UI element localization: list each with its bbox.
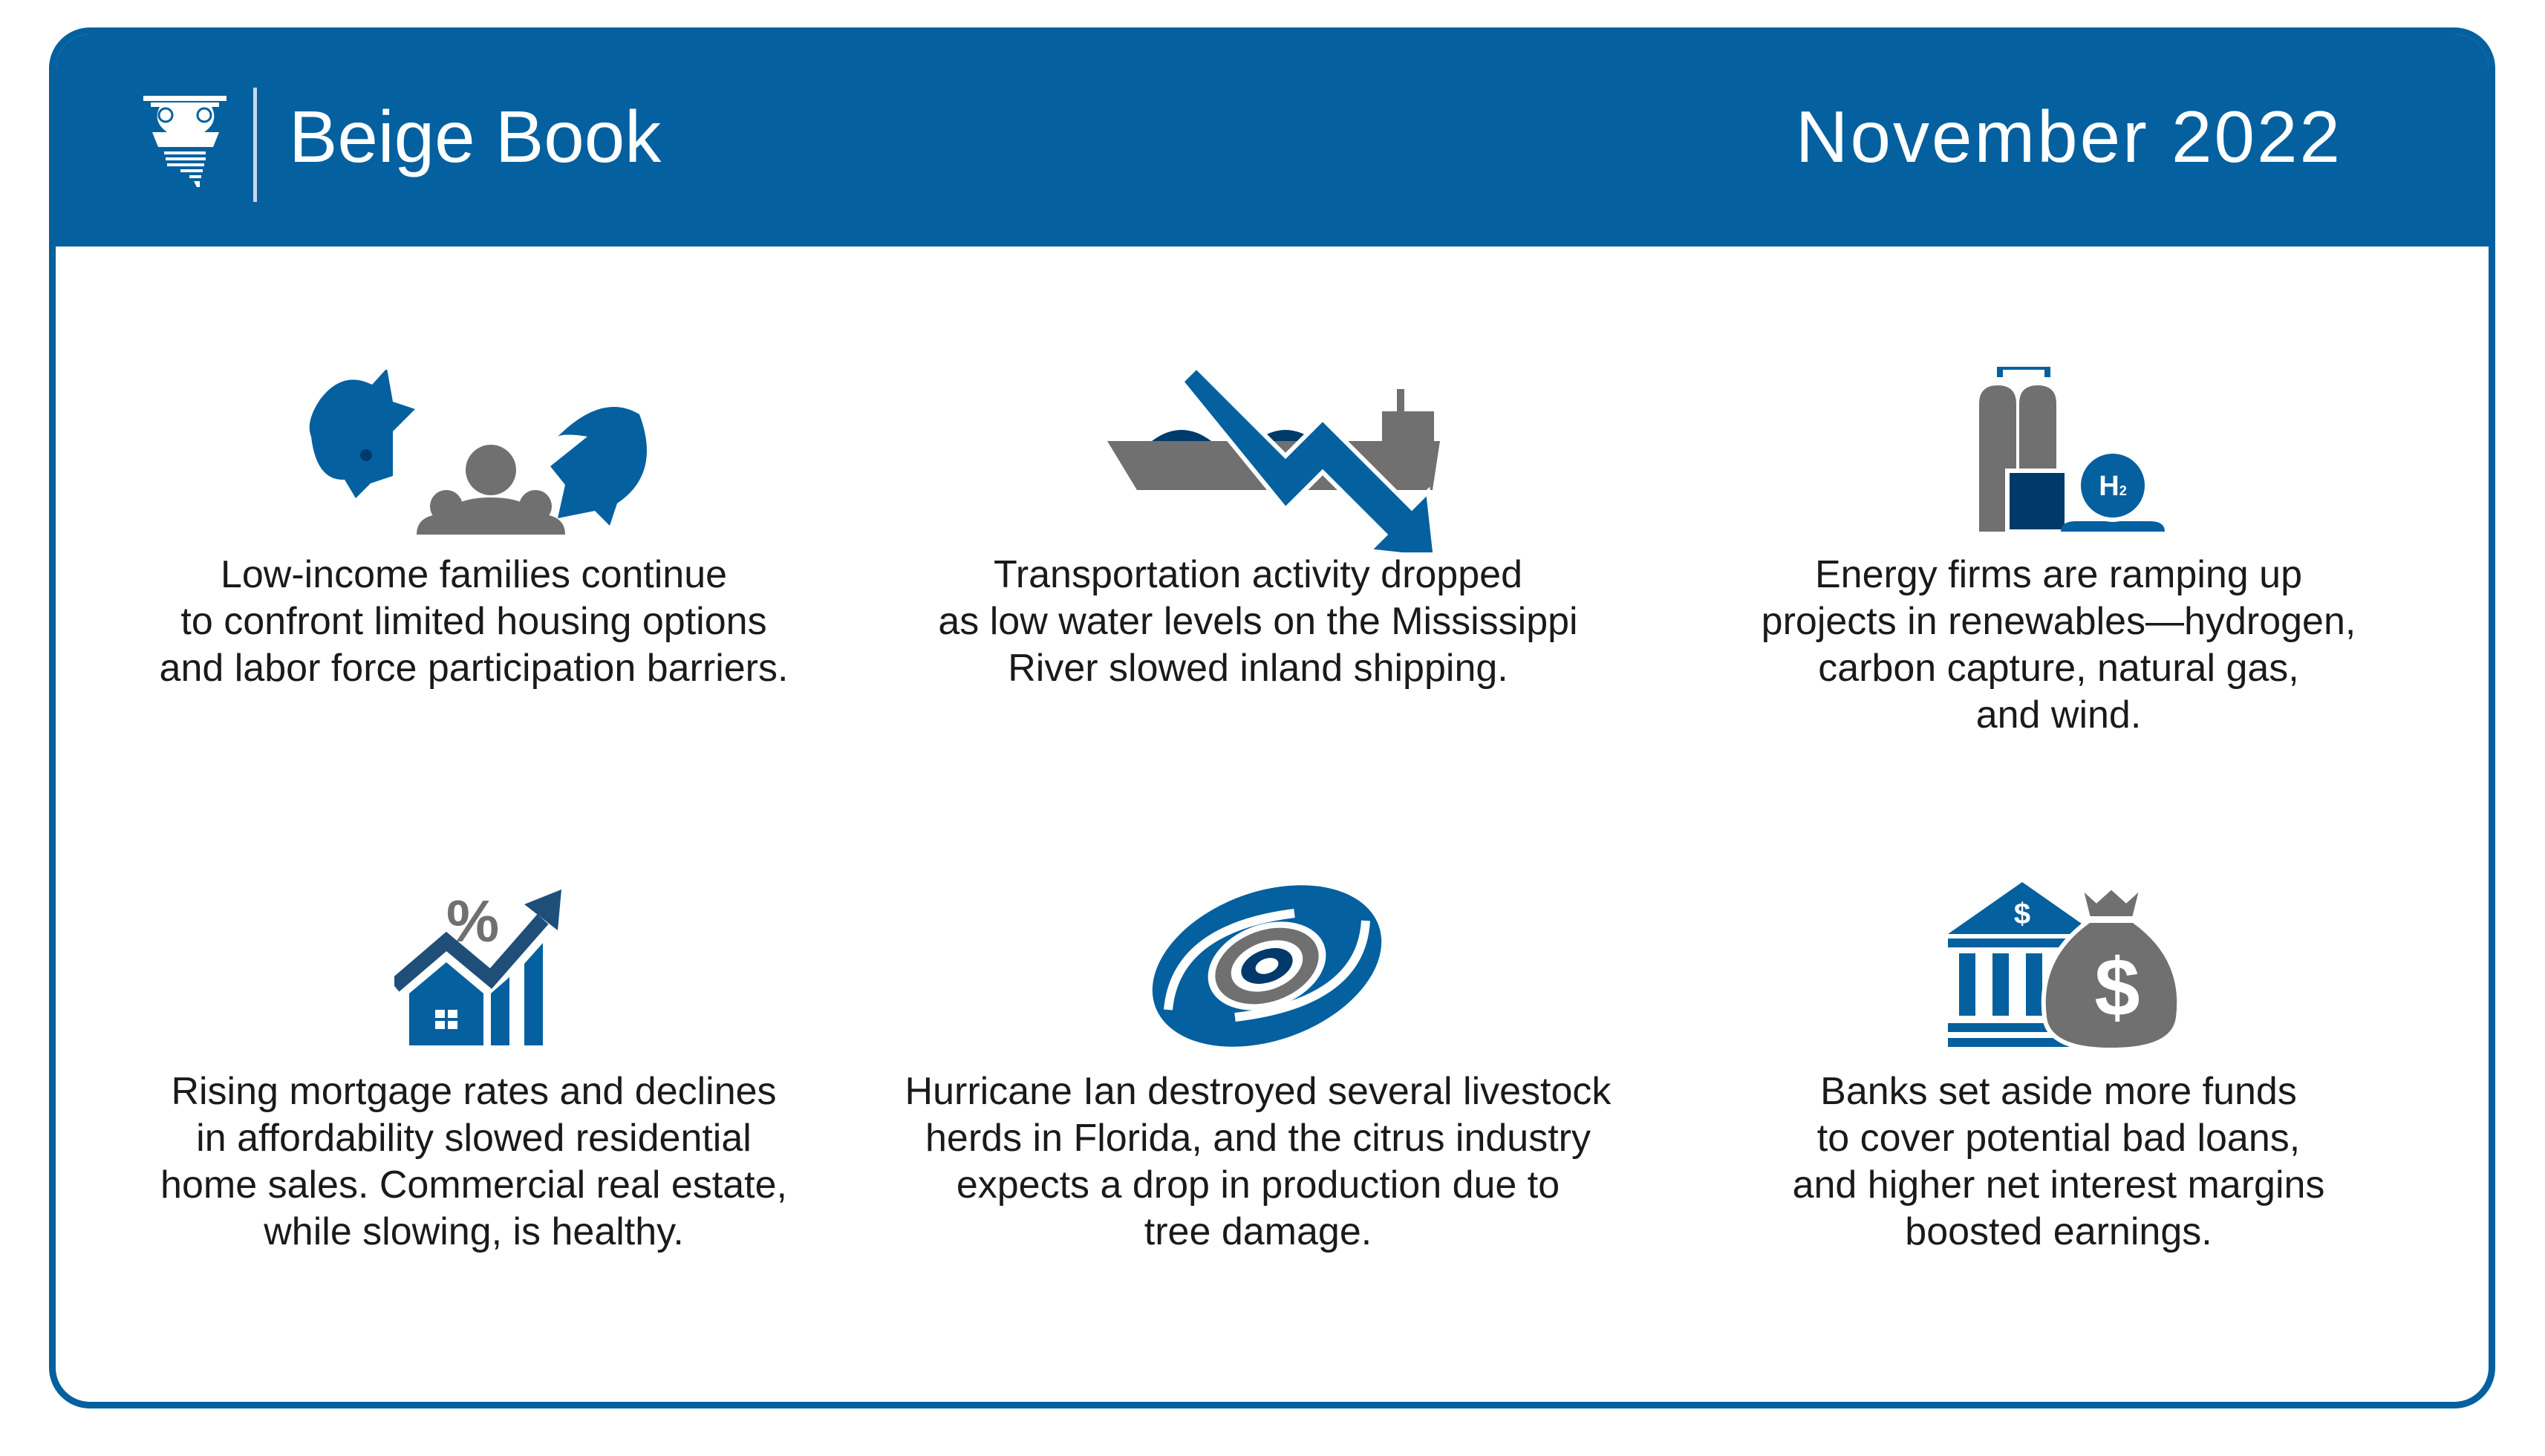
text: mortgage: home sales. Commercial real estate, [160, 1163, 787, 1207]
text: energy: carbon capture, natural gas, [1818, 647, 2299, 690]
icon: hydrogen tanks [1979, 367, 2165, 532]
icon: bank and money bag: $ [2014, 898, 2030, 930]
text: energy: Energy firms are ramping up [1815, 553, 2302, 596]
text: mortgage: Rising mortgage rates and declines [171, 1070, 777, 1113]
header band [56, 34, 2489, 247]
title: Beige Book [289, 96, 661, 177]
icon: barge with down arrow [1107, 370, 1440, 552]
text: transportation: River slowed inland shipping. [1008, 647, 1508, 690]
text: mortgage: while slowing, is healthy. [264, 1210, 684, 1253]
text: banks: to cover potential bad loans, [1817, 1117, 2300, 1160]
text: hurricane: tree damage. [1144, 1210, 1372, 1253]
icon: piggy banks and family [309, 370, 647, 535]
icon: house with rising arrow [394, 888, 561, 1045]
text: energy: and wind. [1976, 693, 2141, 737]
icon: hydrogen tanks: H2 [2099, 471, 2127, 502]
text: banks [1793, 1070, 2324, 1253]
text: banks: and higher net interest margins [1793, 1163, 2324, 1207]
text: hurricane: herds in Florida, and the citrus industry [925, 1117, 1591, 1160]
text: banks: Banks set aside more funds [1820, 1070, 2297, 1113]
text: energy: projects in renewables—hydrogen, [1762, 600, 2356, 643]
text: transportation: Transportation activity dropped [994, 553, 1522, 596]
text: hurricane [905, 1070, 1612, 1253]
text: hurricane: Hurricane Ian destroyed several livestock [905, 1070, 1611, 1113]
text: housing: Low-income families continue [221, 553, 727, 596]
text: hurricane: expects a drop in production due to [957, 1163, 1560, 1207]
text: housing [160, 553, 788, 690]
text: transportation [938, 553, 1578, 690]
text: mortgage [160, 1070, 787, 1253]
text: housing: to confront limited housing options [180, 600, 767, 643]
text: housing: and labor force participation barriers. [160, 647, 788, 690]
divider [253, 88, 257, 202]
icon: hurricane [1153, 885, 1381, 1047]
text: banks: boosted earnings. [1905, 1210, 2212, 1253]
icon: house with rising arrow: % [446, 888, 499, 954]
logo [143, 96, 227, 187]
text: transportation: as low water levels on the Mississippi [938, 600, 1578, 643]
date: November 2022 [1796, 96, 2342, 177]
icon: bank and money bag [1948, 882, 2177, 1048]
text: mortgage: in affordability slowed residential [196, 1117, 752, 1160]
text: energy [1762, 553, 2356, 737]
icon: bank and money bag: $ [2094, 942, 2140, 1034]
